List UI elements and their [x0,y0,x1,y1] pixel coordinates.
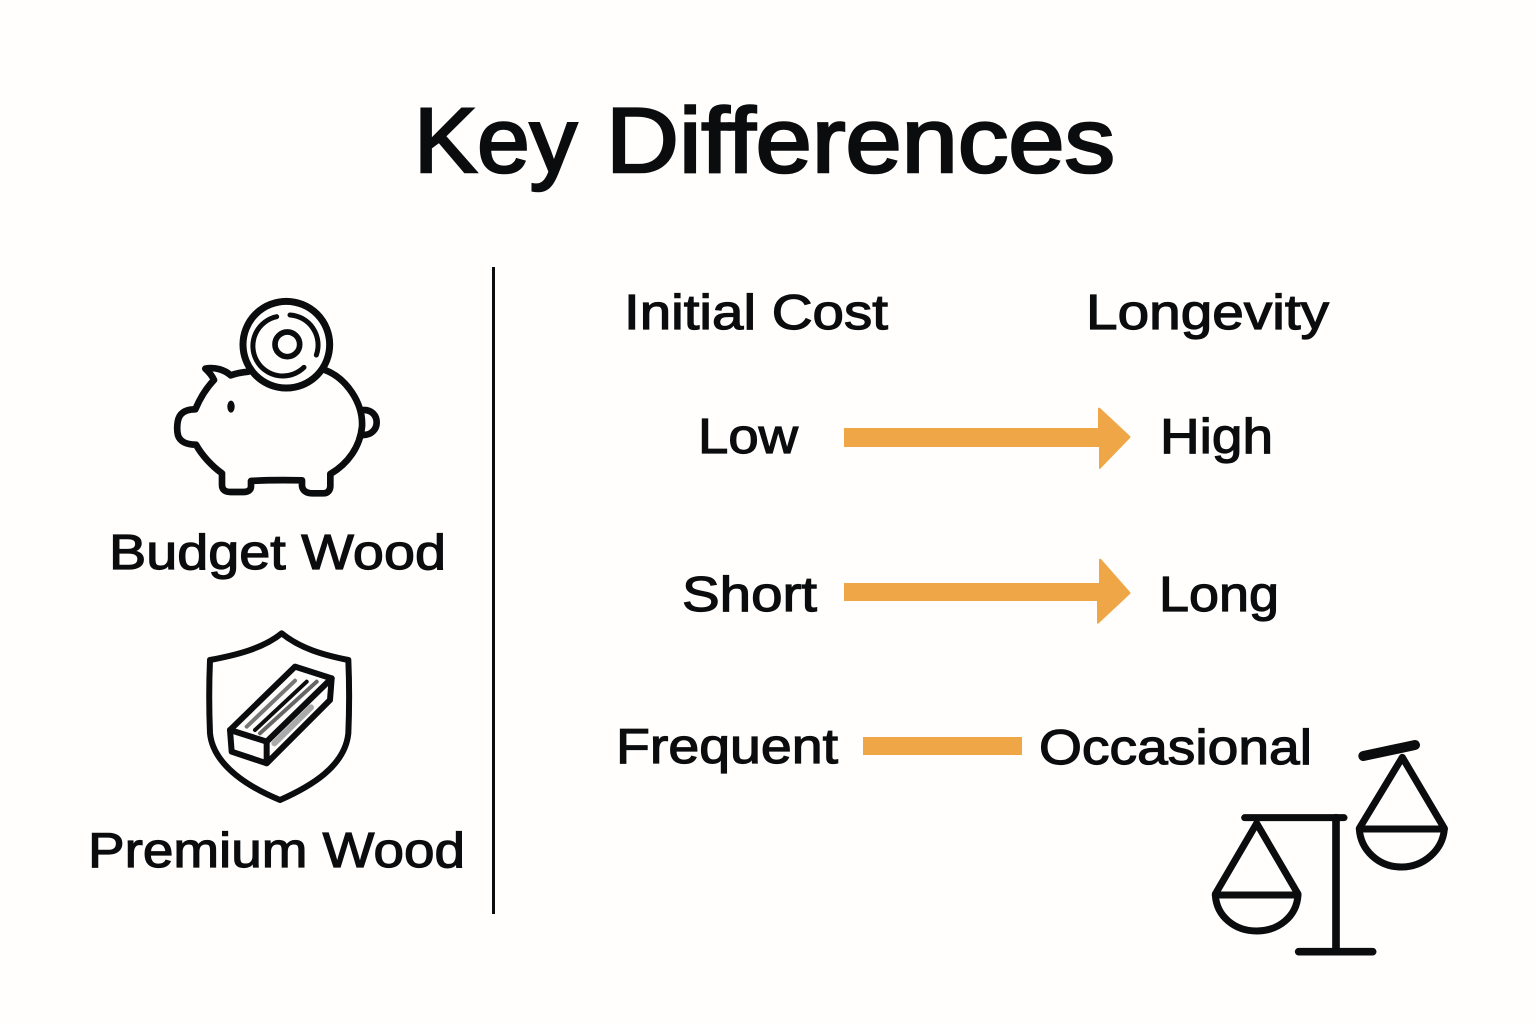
title: Key [414,90,577,192]
label: budget wood: Budget Wood [109,526,446,580]
label: frequent: Frequent [616,720,838,774]
icon: piggy bank with coin [177,301,377,493]
bar: frequent to occasional [863,737,1022,755]
label: short: Short [682,568,817,622]
label: long: Long [1159,568,1279,622]
label: occasional: Occasional [1039,721,1312,775]
title: Differences [606,90,1115,192]
row: frequent to occasional [616,720,1312,775]
row: short to long [682,559,1279,624]
label: high: High [1160,410,1273,464]
icon: shield with wood plank [209,633,349,800]
label: low: Low [698,410,799,464]
row: low to high [698,408,1273,469]
column heading: longevity: Longevity [1086,286,1330,340]
arrow: low to high [844,408,1130,469]
icon: balance scale [1215,745,1444,952]
column heading: initial cost: Initial Cost [624,286,888,340]
vertical divider [492,267,495,914]
label: premium wood: Premium Wood [88,824,465,878]
title [414,90,1115,192]
panel: wood types [88,301,465,878]
arrow: short to long [844,559,1130,624]
